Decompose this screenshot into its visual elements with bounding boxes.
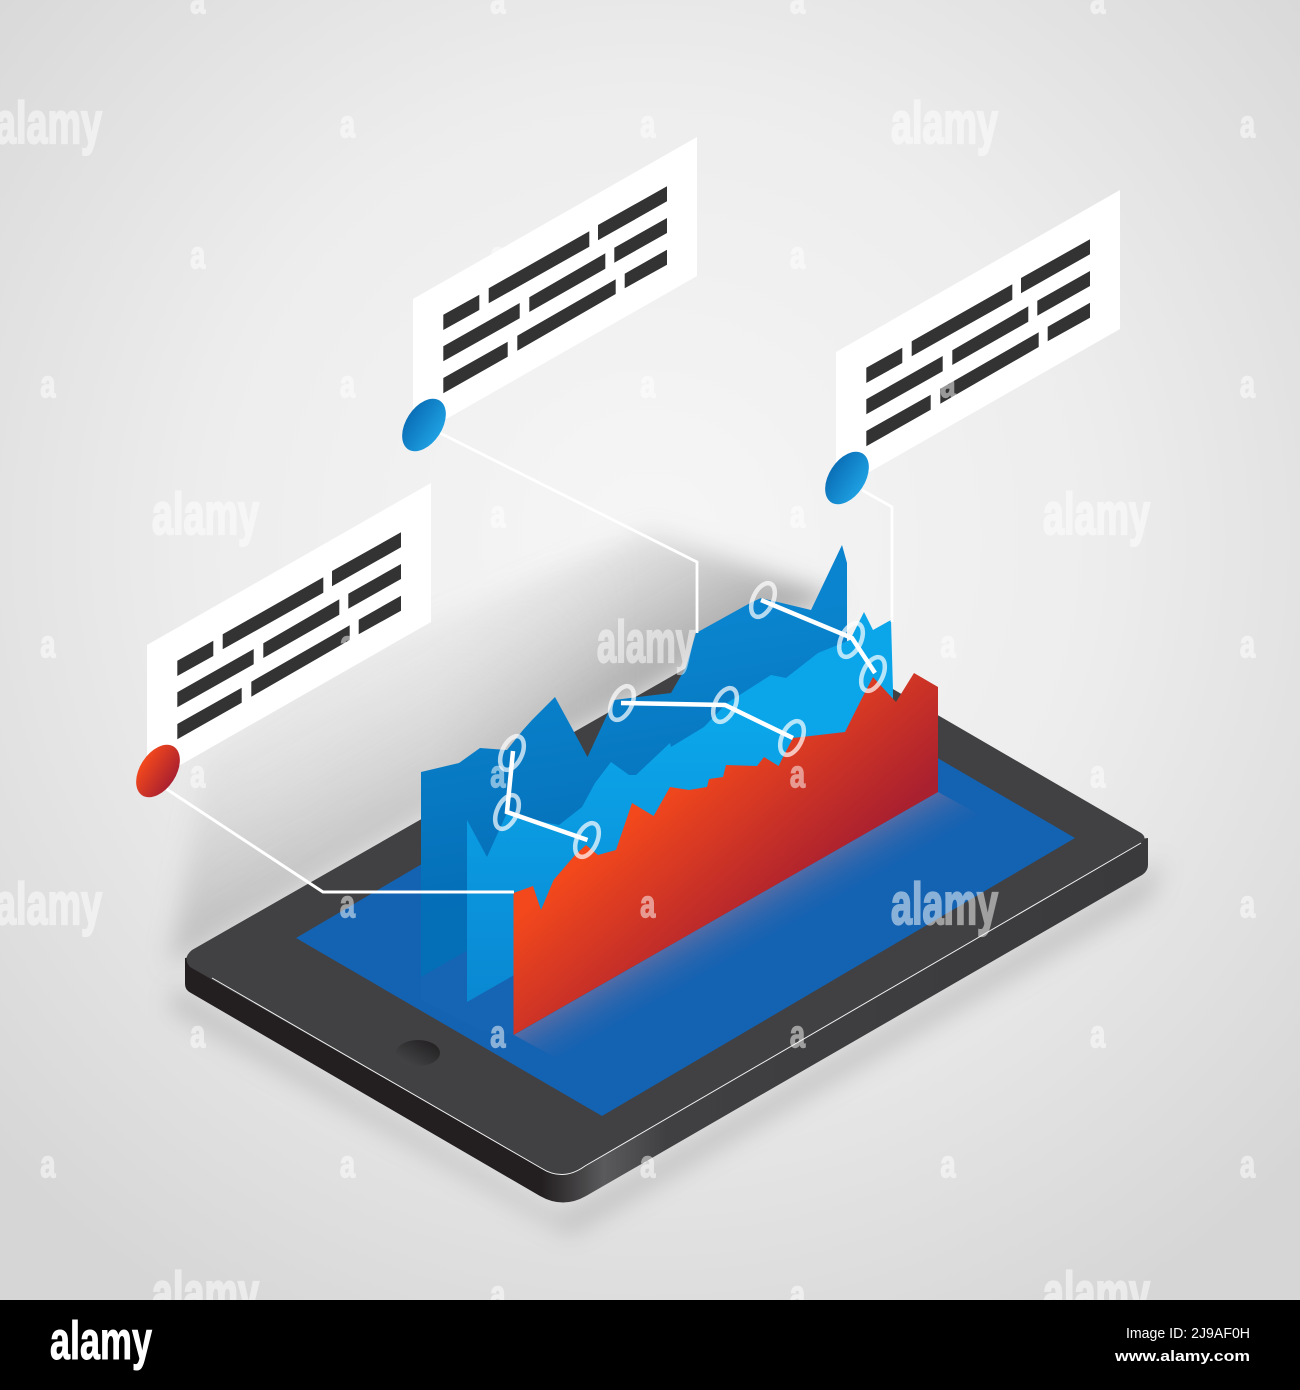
footer url: www.alamy.com	[1114, 1348, 1250, 1365]
data path left	[490, 732, 604, 861]
watermarks: alamy	[597, 610, 695, 675]
watermarks: aaaaa	[40, 1144, 1256, 1186]
watermarks: aaa	[340, 884, 1256, 926]
red area series	[514, 673, 938, 1035]
connector: right blue marker to chart	[862, 490, 892, 622]
watermarks: aa	[490, 494, 806, 536]
screen reflection under the chart	[514, 792, 970, 1054]
tablet	[185, 621, 1148, 1202]
area chart	[421, 545, 938, 1035]
tablet top surface	[186, 621, 1144, 1175]
watermarks: alamy	[891, 872, 998, 937]
shadow cast behind the chart	[170, 530, 840, 965]
watermarks: alamy	[891, 91, 998, 156]
data path middle	[605, 682, 809, 759]
tablet side edge	[185, 838, 1148, 1202]
watermarks: aaaaa	[40, 364, 1256, 406]
callout: right	[816, 190, 1120, 512]
watermarks: alamy	[152, 1261, 259, 1326]
watermarks: alamy	[152, 482, 259, 547]
callout: top	[393, 137, 697, 459]
tablet screen	[296, 660, 1075, 1116]
connector: top blue marker to chart	[440, 433, 697, 633]
data path right	[746, 579, 890, 695]
footer logo: alamy	[50, 1311, 152, 1371]
watermarks: aaa	[340, 104, 1256, 146]
light blue area series	[467, 612, 893, 1002]
watermarks: aaaa	[190, 754, 1106, 796]
dark blue area series	[421, 545, 847, 977]
callout: lower left	[127, 483, 431, 805]
watermarks: alamy	[1043, 1261, 1150, 1326]
tablet home button	[396, 1040, 440, 1066]
watermarks: alamy	[1043, 482, 1150, 547]
watermarks: aa	[490, 1274, 806, 1316]
tablet ground shadow	[170, 860, 1165, 1235]
watermarks: aaaa	[190, 1014, 1106, 1056]
connector: red marker to chart	[165, 788, 514, 892]
tablet edge highlight	[212, 843, 1141, 1175]
footer bar	[0, 1300, 1300, 1390]
watermarks: aaaa	[190, 235, 1106, 277]
watermarks: aaaa	[40, 624, 1256, 666]
footer image id: Image ID: 2J9AF0H	[1126, 1325, 1250, 1342]
